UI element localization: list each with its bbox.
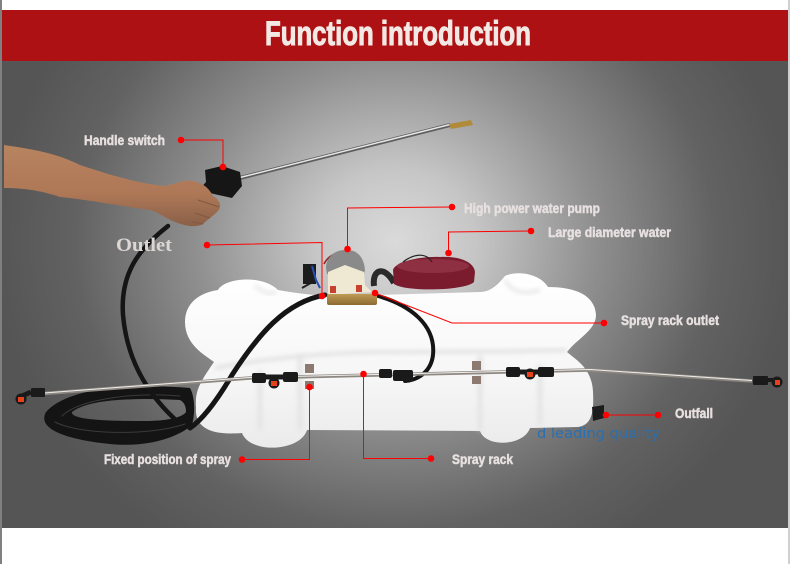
brass nozzle bbox=[449, 120, 473, 129]
icon: pump assembly bbox=[302, 250, 394, 305]
arm bbox=[4, 145, 220, 226]
callout: outlet bbox=[116, 235, 325, 299]
callout: spray rack outlet: Spray rack outlet bbox=[621, 312, 719, 328]
callout: outfall bbox=[603, 405, 713, 421]
icon: tank lid bbox=[393, 255, 475, 289]
callout: fixed position of spray: Fixed position of spray bbox=[104, 451, 231, 467]
callout: fixed position of spray bbox=[104, 384, 313, 467]
callout: handle switch bbox=[84, 132, 226, 170]
callout: handle switch: Handle switch bbox=[84, 132, 165, 148]
callout: spray rack bbox=[360, 371, 513, 467]
title: Function introduction bbox=[265, 15, 531, 53]
callout: outfall: Outfall bbox=[675, 405, 713, 421]
icon: coiled hose bbox=[44, 226, 433, 445]
callout: high power water pump bbox=[344, 200, 600, 252]
callout: large diameter water bbox=[445, 224, 671, 256]
watermark text: d leading quality bbox=[537, 426, 660, 442]
callout: outlet: Outlet bbox=[116, 235, 173, 256]
callout: spray rack: Spray rack bbox=[452, 451, 513, 467]
icon: outfall valve bbox=[592, 405, 604, 421]
icon: spray rack bbox=[16, 367, 782, 404]
icon: water tank bbox=[185, 273, 596, 448]
callout: high power water pump: High power water pump bbox=[464, 200, 600, 216]
icon: arm and hand holding spray gun bbox=[4, 120, 473, 226]
callout: spray rack outlet bbox=[372, 290, 719, 328]
gun head bbox=[199, 166, 242, 198]
spray lance bbox=[240, 125, 450, 178]
title banner bbox=[2, 10, 788, 61]
callout: large diameter water: Large diameter water bbox=[548, 224, 671, 240]
brackets bbox=[305, 361, 481, 389]
